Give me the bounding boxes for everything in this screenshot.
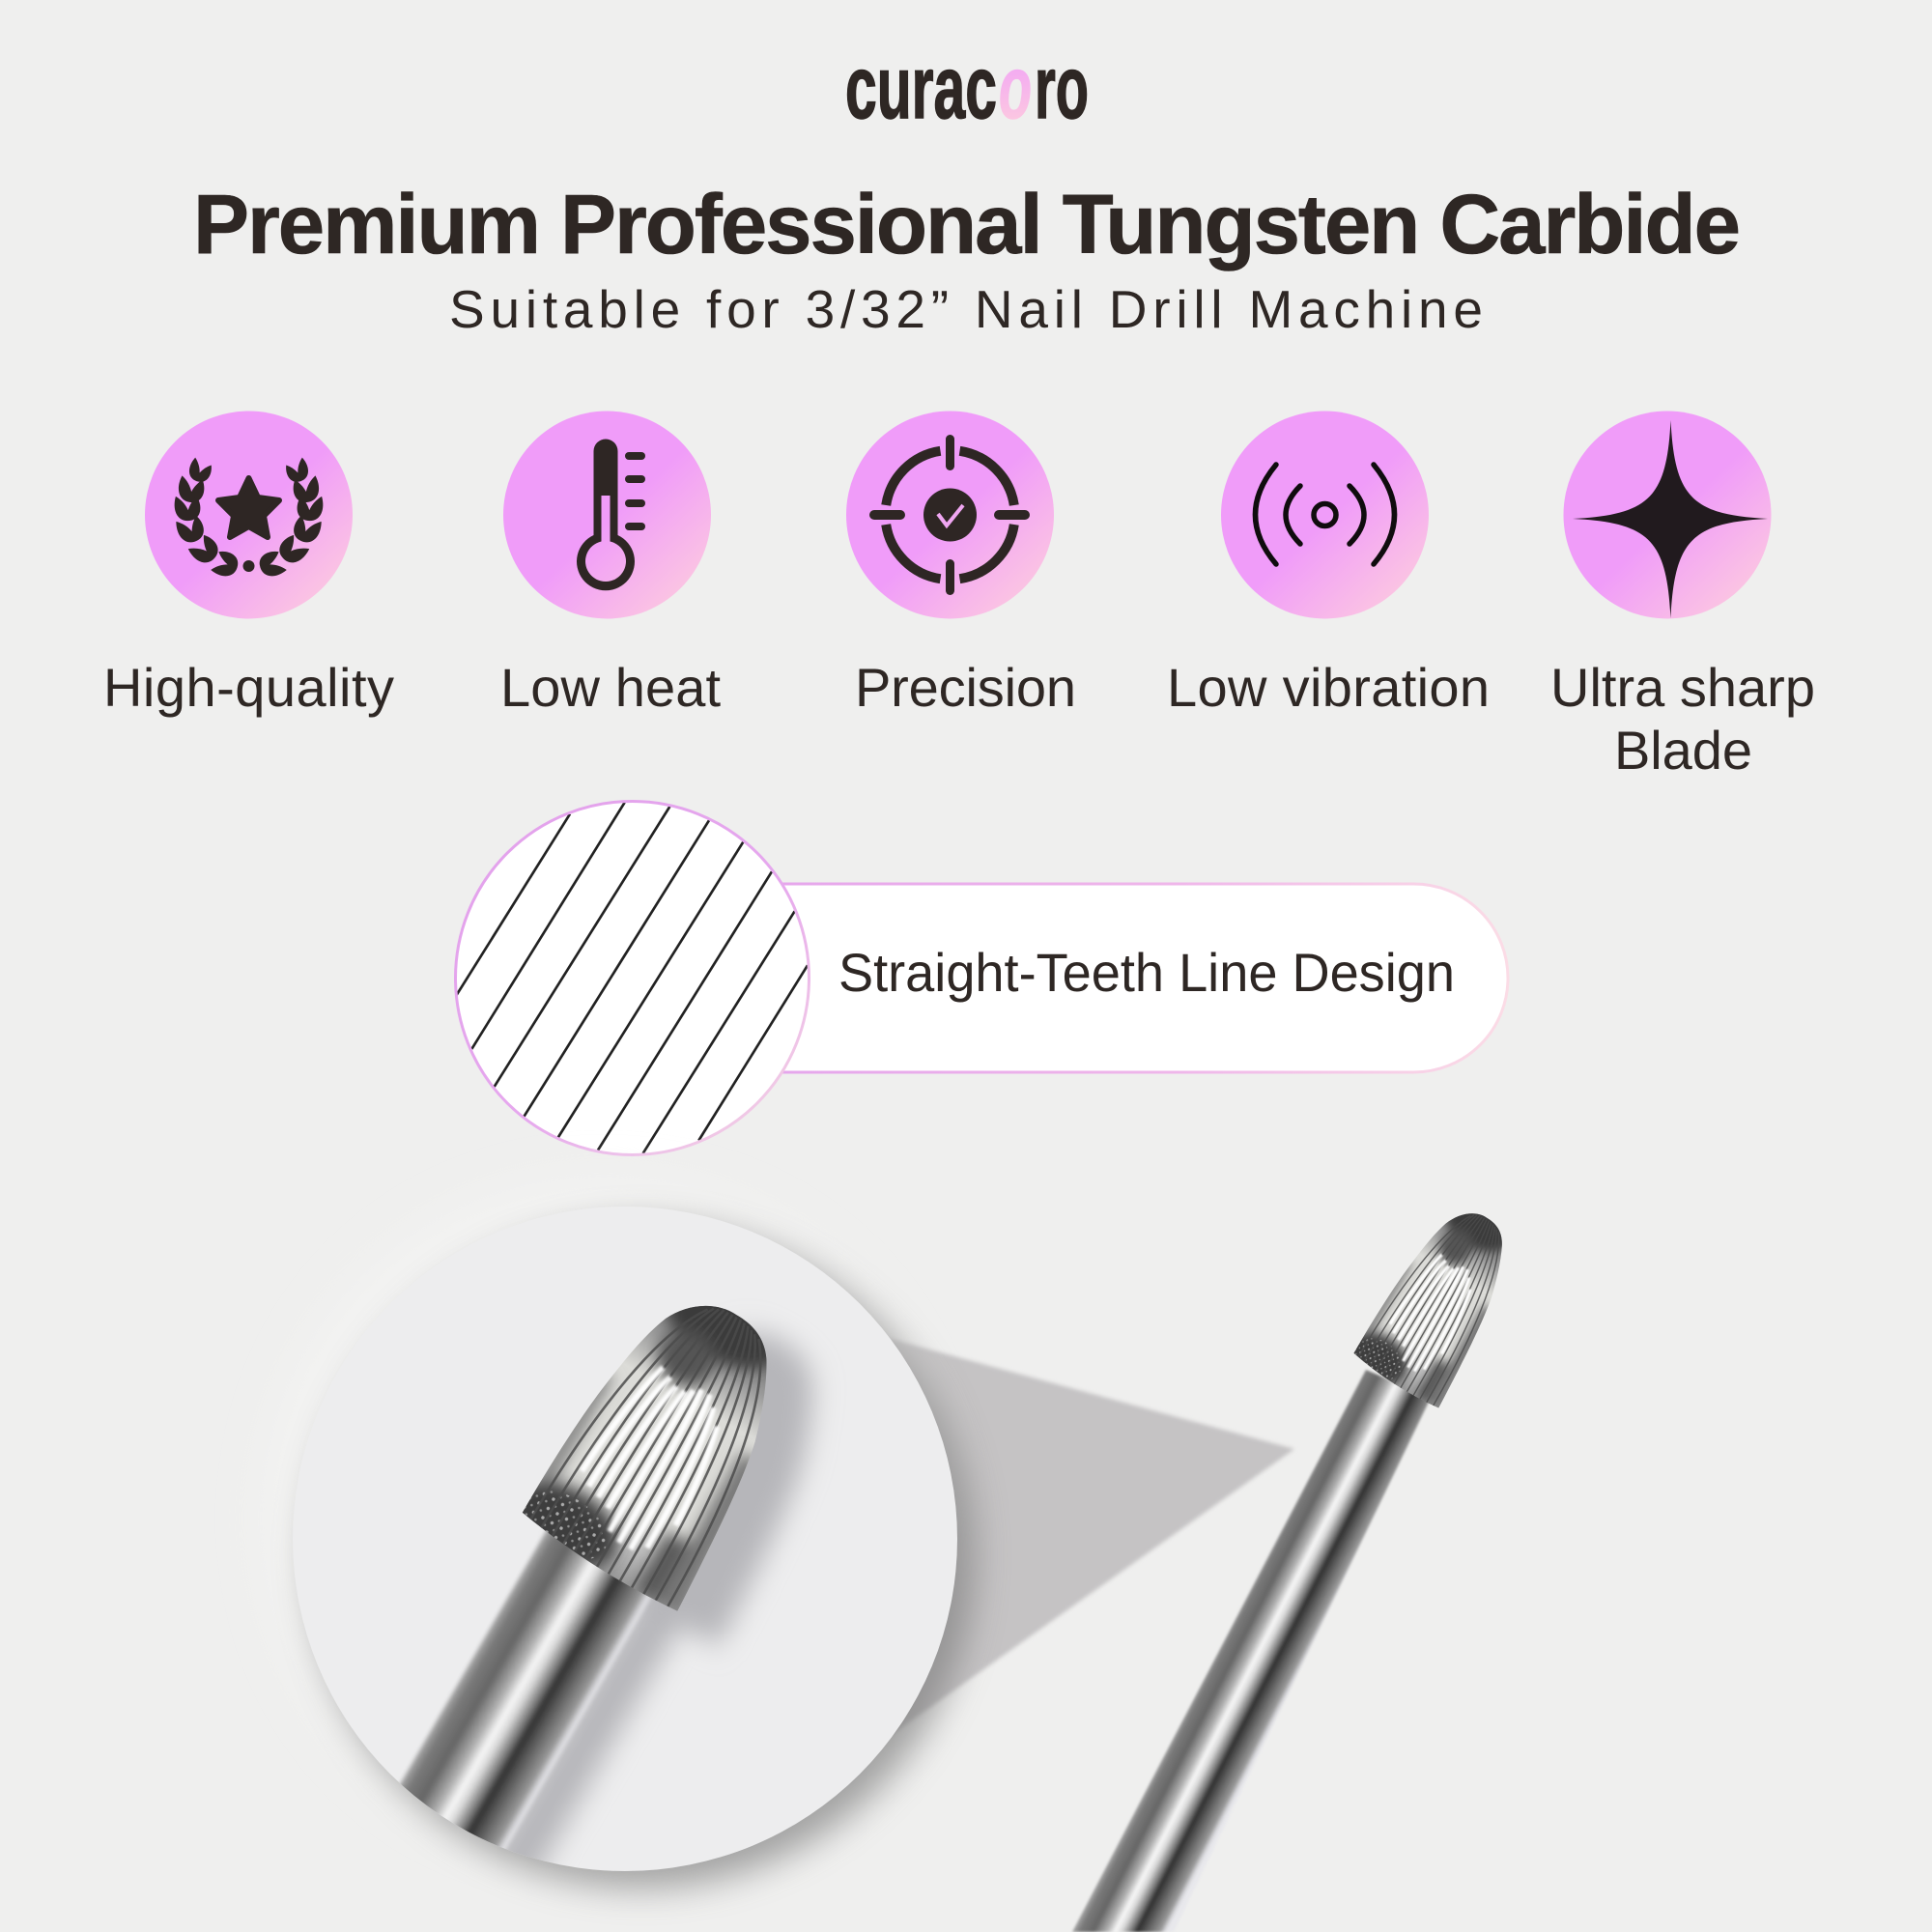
feature: low heat [500,412,721,718]
feature: precision [846,412,1076,718]
pointer: magnification shadow triangle [869,1333,1294,1750]
feature: ultra sharp blade [1550,412,1815,781]
pill text: Straight-Teeth Line Design [838,942,1455,1003]
panel: magnified bur circle [266,1180,974,1932]
pill [676,884,1508,1072]
subtitle: Suitable for 3/32” Nail Drill Machine [449,279,1483,339]
label: Ultra sharp [1550,657,1815,718]
icon: target with check [846,412,1054,618]
icon: vibration waves [1221,412,1429,618]
logo: curacoro: ro [1035,39,1089,137]
head [1337,1180,1541,1420]
label: Low heat [500,657,721,718]
logo: curacoro: curac [845,39,997,137]
feature: high-quality [103,412,394,718]
callout: straight-teeth line design [456,802,1508,1155]
logo: curacoro: o [999,39,1032,137]
label: Blade [1614,720,1752,781]
icon: thermometer [503,412,711,618]
feature: low vibration [1167,412,1490,718]
label: High-quality [103,657,394,718]
swatch: straight teeth lines [456,802,810,1155]
product: full bur [1072,1180,1541,1932]
magnified bur [399,1306,825,1864]
label: Precision [855,657,1076,718]
shank [1072,1370,1431,1932]
label [1550,657,1815,781]
icon: laurel wreath with star [145,412,353,618]
icon: four-point sparkle [1563,412,1772,618]
title: Premium Professional Tungsten Carbide [193,178,1741,271]
label: Low vibration [1167,657,1490,718]
